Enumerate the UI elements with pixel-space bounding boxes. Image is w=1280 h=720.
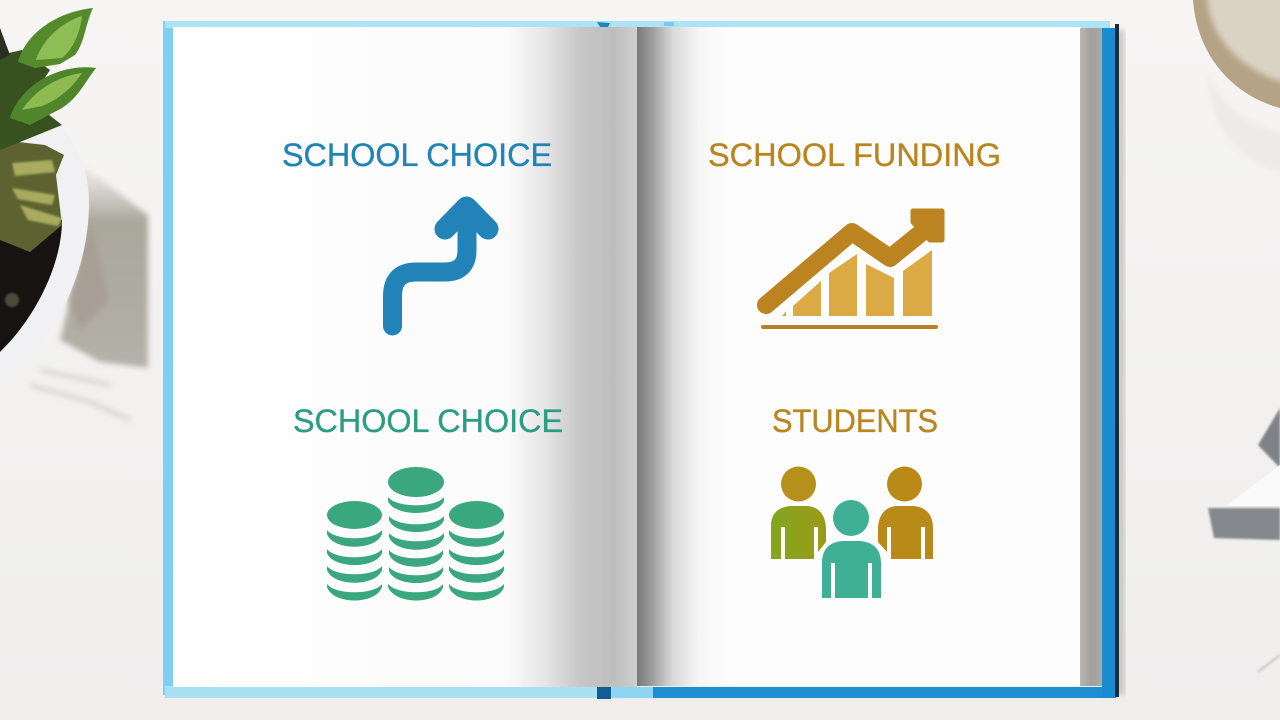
heading: SCHOOL CHOICE — [293, 403, 563, 439]
icon: three students — [771, 466, 933, 598]
right cover — [1102, 28, 1116, 698]
pot — [0, 113, 89, 388]
baseline — [761, 325, 938, 329]
right stack — [449, 501, 504, 600]
heading: STUDENTS — [772, 403, 938, 439]
open book — [163, 21, 1124, 699]
student right — [878, 466, 933, 559]
icon: coin stacks — [327, 467, 504, 600]
middle stack — [388, 467, 444, 600]
upper leaf — [18, 8, 93, 68]
bars — [782, 311, 786, 316]
student left — [771, 466, 826, 559]
bottom cover edge — [165, 686, 597, 698]
section: students — [771, 403, 938, 598]
plant in white pot — [0, 8, 96, 388]
yellow-green lower leaves — [0, 140, 64, 252]
left page — [173, 27, 637, 687]
top cover edge — [165, 21, 1110, 28]
heading: SCHOOL CHOICE — [282, 137, 552, 173]
icon: rising bar chart — [761, 211, 942, 329]
section: school choice, green — [293, 403, 563, 600]
dark stem mass — [0, 50, 62, 150]
heading: SCHOOL FUNDING — [708, 137, 1001, 173]
spine marks top — [597, 22, 610, 27]
page stack edge — [1080, 28, 1102, 686]
left cover edge — [163, 21, 173, 695]
section: school funding, amber — [708, 137, 1001, 329]
pencil sketch right — [1208, 408, 1280, 672]
coffee cup top-right — [1193, 0, 1280, 172]
lower leaf — [10, 67, 96, 125]
icon: winding up arrow — [392, 207, 488, 326]
right page — [637, 27, 1081, 686]
section: school choice, blue — [282, 137, 552, 326]
soil — [0, 220, 62, 352]
left stack — [327, 501, 382, 600]
book shadow — [1118, 30, 1124, 695]
student centre — [822, 500, 881, 598]
